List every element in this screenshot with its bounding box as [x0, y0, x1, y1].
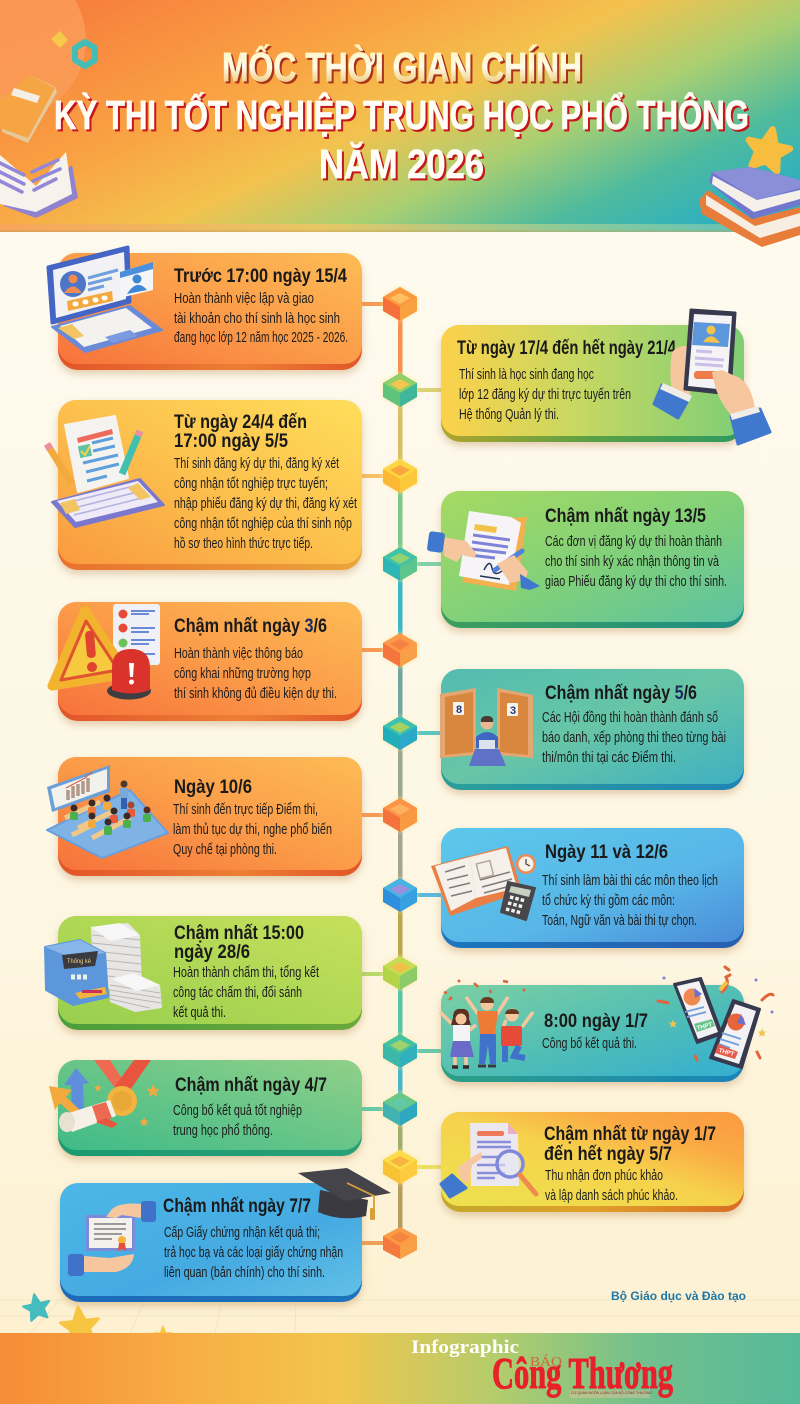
body text: [173, 801, 332, 858]
body text: tài khoản cho thí sinh là học sinh: [174, 310, 340, 327]
heading: ngày 28/6: [174, 942, 250, 963]
heading: Chậm nhất ngày 3/6: [174, 616, 327, 637]
icon: exam room doors and student: 3: [510, 705, 516, 717]
body text: Các đơn vị đăng ký dự thi hoàn thành: [545, 533, 722, 550]
body text: trung học phổ thông.: [173, 1122, 273, 1139]
panel: chậm nhất ngày 13/5: [427, 491, 744, 628]
title: [54, 44, 749, 187]
heading: Chậm nhất ngày 5/6: [545, 683, 697, 704]
node 9: [383, 956, 417, 990]
node 2: [383, 373, 417, 407]
icon: book stack: [699, 167, 800, 247]
icon: result phones and confetti: THPT: [696, 1022, 713, 1032]
body text: Hoàn thành việc thông báo: [174, 645, 303, 662]
panel: chậm nhất từ ngày 1/7 đến hết ngày 5/7: [441, 1112, 744, 1212]
heading: Ngày 11 và 12/6: [545, 842, 668, 863]
icon: document and magnifier: [441, 1123, 536, 1197]
heading: 17:00 ngày 5/5: [174, 431, 288, 452]
heading: Chậm nhất ngày 4/7: [175, 1075, 327, 1096]
body text: Toán, Ngữ văn và bài thi tự chọn.: [542, 912, 697, 929]
node 1: [383, 287, 417, 321]
node 3: [383, 459, 417, 493]
icon: exam room doors and student: 8: [456, 704, 462, 716]
body text: Thí sinh là học sinh đang học: [459, 366, 594, 383]
node 6: [383, 716, 417, 750]
body text: công khai những trường hợp: [174, 665, 311, 682]
body text: đang học lớp 12 năm học 2025 - 2026.: [174, 329, 348, 346]
icon: gold star: [744, 125, 793, 173]
panel: trước 17:00 ngày 15/4: [48, 247, 362, 370]
panel: chậm nhất ngày 3/6: [52, 602, 362, 721]
icon: scanner and paper stacks: [45, 923, 162, 1012]
body text: [173, 1102, 302, 1139]
node 5: [383, 633, 417, 667]
panel: từ ngày 17/4 đến hết ngày 21/4: [441, 310, 770, 444]
heading: [544, 1124, 716, 1165]
panel: ngày 10/6: [47, 757, 362, 876]
body text: kết quả thi.: [173, 1004, 226, 1021]
logo: Báo Công Thương: BÁO: [530, 1353, 562, 1370]
panel: chậm nhất ngày 5/6: [440, 669, 744, 790]
icon: exam room doors and student: [440, 688, 533, 766]
icon: hands holding phone: [654, 310, 770, 444]
decoration: bottom stars: [21, 1292, 172, 1345]
body text: Hoàn thành chấm thi, tổng kết: [173, 964, 320, 981]
logo: Báo Công Thương: CƠ QUAN NGÔN LUẬN CỦA BỘ CÔNG THƯƠNG: [571, 1390, 652, 1395]
source credit: Bộ Giáo dục và Đào tạo: [611, 1291, 746, 1303]
node 4: [383, 547, 417, 581]
body text: [174, 645, 337, 702]
body text: Các Hội đồng thi hoàn thành đánh số: [542, 709, 718, 726]
body text: cho thí sinh ký xác nhận thông tin và: [545, 553, 719, 570]
decoration: light circle: [0, 0, 86, 118]
timeline nodes: [383, 287, 417, 1259]
header banner: [0, 0, 800, 247]
body text: tổ chức kỳ thi gồm các môn:: [542, 892, 675, 909]
body text: báo danh, xếp phòng thi theo từng bài: [542, 729, 726, 746]
panel: chậm nhất 15:00 ngày 28/6: [45, 916, 362, 1030]
body text: Hệ thống Quản lý thi.: [459, 406, 559, 423]
heading: Ngày 10/6: [174, 777, 252, 798]
footer banner: [0, 1333, 800, 1404]
heading: [174, 923, 304, 963]
heading: Chậm nhất ngày 7/7: [163, 1196, 311, 1217]
node 13: [383, 1227, 417, 1259]
body text: Công bố kết quả tốt nghiệp: [173, 1102, 302, 1119]
body text: [545, 1167, 678, 1204]
heading: [174, 412, 307, 452]
icon: form and keyboard: [47, 416, 164, 527]
body text: Thí sinh đến trực tiếp Điểm thi,: [173, 801, 318, 818]
body text: thí sinh không đủ điều kiện dự thi.: [174, 685, 337, 702]
icon: yellow diamond: [51, 31, 68, 48]
panel: ngày 11 và 12/6: [431, 828, 744, 948]
panel: từ ngày 24/4 đến 17:00 ngày 5/5: [47, 400, 362, 570]
body text: [174, 455, 358, 552]
icon: notebook: [0, 75, 57, 143]
body text: công tác chấm thi, đối sánh: [173, 984, 302, 1001]
body text: Thí sinh đăng ký dự thi, đăng ký xét: [174, 455, 340, 472]
node 11: [383, 1092, 417, 1126]
body text: giao Phiếu đăng ký dự thi cho thí sinh.: [545, 573, 727, 590]
heading: đến hết ngày 5/7: [544, 1144, 672, 1165]
title line 3: NĂM 2026: [319, 141, 484, 187]
panel: chậm nhất ngày 7/7: [60, 1168, 391, 1302]
icon: result phones and confetti: THPT: [718, 1048, 735, 1058]
body text: [542, 872, 718, 929]
body text: [542, 709, 726, 766]
body text: công nhận tốt nghiệp của thí sinh nộp: [174, 515, 352, 532]
body text: [164, 1224, 343, 1281]
body text: Thí sinh làm bài thi các môn theo lịch: [542, 872, 718, 889]
node 12: [383, 1150, 417, 1184]
heading: Chậm nhất từ ngày 1/7: [544, 1124, 716, 1145]
icon: warning and siren: [52, 604, 160, 700]
body text: [174, 290, 348, 346]
heading: Trước 17:00 ngày 15/4: [174, 266, 347, 287]
heading: 8:00 ngày 1/7: [544, 1011, 648, 1032]
body text: hồ sơ theo hình thức trực tiếp.: [174, 535, 313, 552]
timeline spine: [362, 302, 441, 1245]
panel: chậm nhất ngày 4/7: [49, 1060, 362, 1156]
icon: signing a document: [427, 511, 540, 591]
body text: Cấp Giấy chứng nhận kết quả thi;: [164, 1224, 320, 1241]
body text: và lập danh sách phúc khảo.: [545, 1187, 678, 1204]
icon: celebrating students: [440, 980, 533, 1067]
body text: Quy chế tại phòng thi.: [173, 841, 277, 858]
body text: trả học bạ và các loại giấy chứng nhận: [164, 1244, 343, 1261]
heading: Từ ngày 24/4 đến: [174, 412, 307, 433]
body text: thi/môn thi tại các Điểm thi.: [542, 749, 676, 766]
footer label: Infographic: [411, 1337, 519, 1358]
body text: [173, 964, 320, 1021]
heading: Từ ngày 17/4 đến hết ngày 21/4: [457, 338, 676, 359]
body text: [459, 366, 631, 423]
body text: Thu nhận đơn phúc khảo: [545, 1167, 663, 1184]
floor pattern: [0, 1300, 800, 1333]
node 10: [383, 1034, 417, 1068]
body text: liên quan (bản chính) cho thí sinh.: [164, 1264, 325, 1281]
icon: book, clock and calculator: [431, 846, 536, 920]
body text: làm thủ tục dự thi, nghe phổ biến: [173, 821, 332, 838]
icon: graduation cap: [298, 1168, 391, 1220]
icon: result phones and confetti: [658, 967, 774, 1068]
node 8: [383, 878, 417, 912]
heading: Chậm nhất ngày 13/5: [545, 506, 706, 527]
body text: Công bố kết quả thi.: [542, 1035, 637, 1052]
logo: Báo Công Thương: Công Thương: [492, 1349, 673, 1398]
title line 1: MỐC THỜI GIAN CHÍNH: [222, 44, 582, 90]
body text: nhập phiếu đăng ký dự thi, đăng ký xét: [174, 495, 358, 512]
body text: lớp 12 đăng ký dự thi trực tuyến trên: [459, 386, 631, 403]
icon: certificate with hands: [68, 1201, 156, 1276]
heading: Chậm nhất 15:00: [174, 923, 304, 944]
body text: công nhận tốt nghiệp trực tuyến;: [174, 475, 328, 492]
icon: open book: [0, 152, 78, 218]
body text: Hoàn thành việc lập và giao: [174, 290, 314, 307]
panel: 8:00 ngày 1/7: [440, 967, 774, 1082]
icon: scanner and paper stacks: Thống kê: [67, 959, 92, 965]
icon: medal and diploma: [49, 1060, 160, 1132]
node 7: [383, 798, 417, 832]
icon: laptop: [48, 247, 162, 352]
icon: teal hexagon ring: [75, 42, 95, 66]
icon: classroom: [47, 765, 168, 858]
logo: Báo Công Thương: [492, 1349, 673, 1398]
body text: [545, 533, 727, 590]
